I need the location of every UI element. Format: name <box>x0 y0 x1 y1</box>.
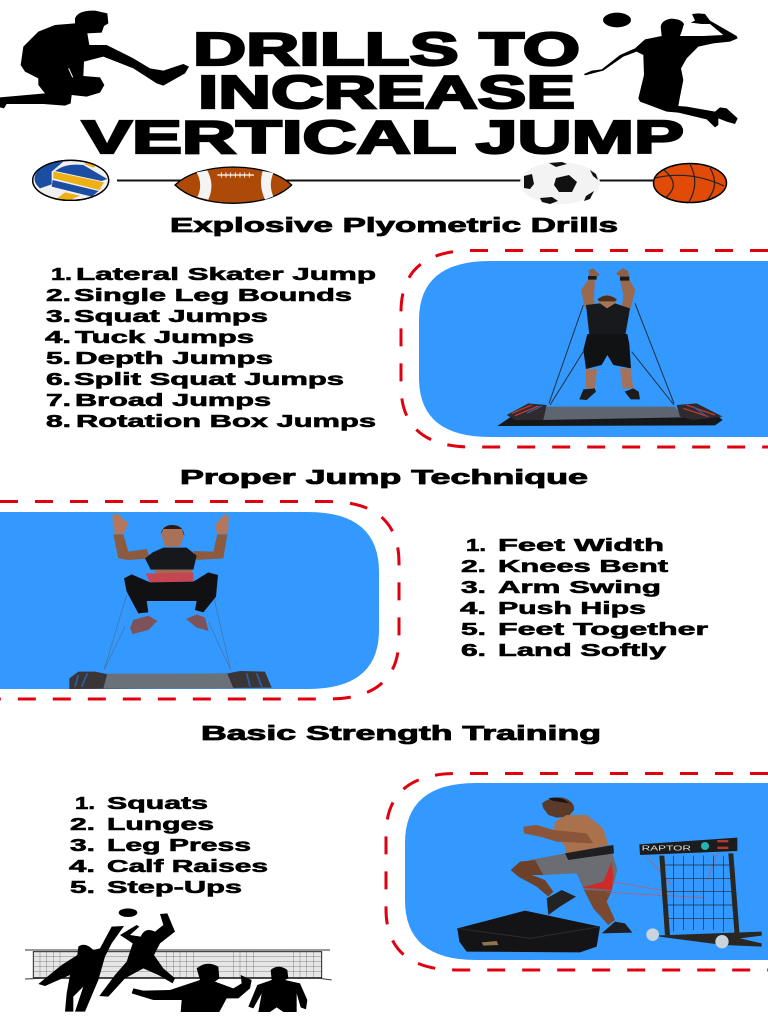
list: jump technique: 3. <box>461 577 486 597</box>
list: jump technique <box>460 535 708 660</box>
list: jump technique: 6. <box>461 640 486 660</box>
list: strength training: 1. <box>75 793 95 813</box>
list: plyometric drills: Tuck Jumps <box>75 327 254 347</box>
list: strength training: Step-Ups <box>107 877 242 897</box>
panel: strength photo <box>386 774 768 970</box>
list: strength training: 4. <box>69 856 95 876</box>
list: strength training: 5. <box>70 877 95 897</box>
list: jump technique: Knees Bent <box>498 556 668 576</box>
list: plyometric drills: Rotation Box Jumps <box>76 411 376 431</box>
list: strength training: 3. <box>70 835 95 855</box>
title: INCREASE <box>198 66 575 118</box>
list: plyometric drills: 6. <box>46 369 71 389</box>
icon: soccer ball <box>520 162 600 204</box>
list: strength training: Leg Press <box>107 835 251 855</box>
list: jump technique: 1. <box>466 535 486 555</box>
list: strength training: Lunges <box>107 814 214 834</box>
icon: volleyball <box>33 160 109 200</box>
list: jump technique: 4. <box>460 598 486 618</box>
list: jump technique: Land Softly <box>498 640 666 660</box>
list: plyometric drills: 3. <box>46 306 71 326</box>
heading: explosive plyometric drills: Explosive Plyometric Drills <box>170 215 618 237</box>
list: plyometric drills: Lateral Skater Jump <box>76 264 376 284</box>
illustration: volleyball players silhouette at net <box>25 908 332 1012</box>
panel: plyometric photo <box>401 250 768 447</box>
heading: proper jump technique: Proper Jump Technique <box>180 467 588 489</box>
title: VERTICAL JUMP <box>82 111 684 163</box>
list: plyometric drills: Split Squat Jumps <box>74 369 344 389</box>
icon: basketball <box>654 164 726 202</box>
title: DRILLS TO <box>193 23 580 75</box>
list: plyometric drills: 4. <box>45 327 71 347</box>
net <box>25 950 332 980</box>
list: plyometric drills: Single Leg Bounds <box>74 285 352 305</box>
list: jump technique: 2. <box>461 556 486 576</box>
list: plyometric drills: 8. <box>46 411 71 431</box>
list: strength training: 2. <box>70 814 95 834</box>
figure: woman jumping over platform <box>69 514 272 689</box>
list: plyometric drills <box>45 264 376 431</box>
list: jump technique: Arm Swing <box>498 577 661 597</box>
icon: spiking player silhouette <box>584 13 738 127</box>
figure: man stepping up on box beside raptor trainer: RAPTOR <box>642 843 691 852</box>
list: plyometric drills: 5. <box>46 348 71 368</box>
players <box>38 908 307 1012</box>
connector line between balls <box>117 180 653 182</box>
title <box>82 23 684 163</box>
list: jump technique: Push Hips <box>498 598 646 618</box>
list: plyometric drills: Squat Jumps <box>74 306 268 326</box>
list: plyometric drills: 7. <box>46 390 71 410</box>
panel: technique photo <box>0 502 399 699</box>
figure: man stepping up on box beside raptor trainer <box>457 797 762 952</box>
list: jump technique: 5. <box>461 619 486 639</box>
list: strength training <box>69 793 268 897</box>
list: plyometric drills: 1. <box>51 264 72 284</box>
list: jump technique: Feet Together <box>498 619 708 639</box>
list: strength training: Squats <box>107 793 208 813</box>
icon: american football <box>175 167 292 203</box>
list: strength training: Calf Raises <box>107 856 268 876</box>
heading: basic strength training: Basic Strength Training <box>201 723 601 745</box>
figure: man jumping on platform <box>497 268 723 426</box>
list: plyometric drills: Broad Jumps <box>75 390 271 410</box>
list: plyometric drills: 2. <box>46 285 71 305</box>
list: jump technique: Feet Width <box>498 535 664 555</box>
icon: kneeling player silhouette <box>0 11 189 108</box>
list: plyometric drills: Depth Jumps <box>75 348 273 368</box>
